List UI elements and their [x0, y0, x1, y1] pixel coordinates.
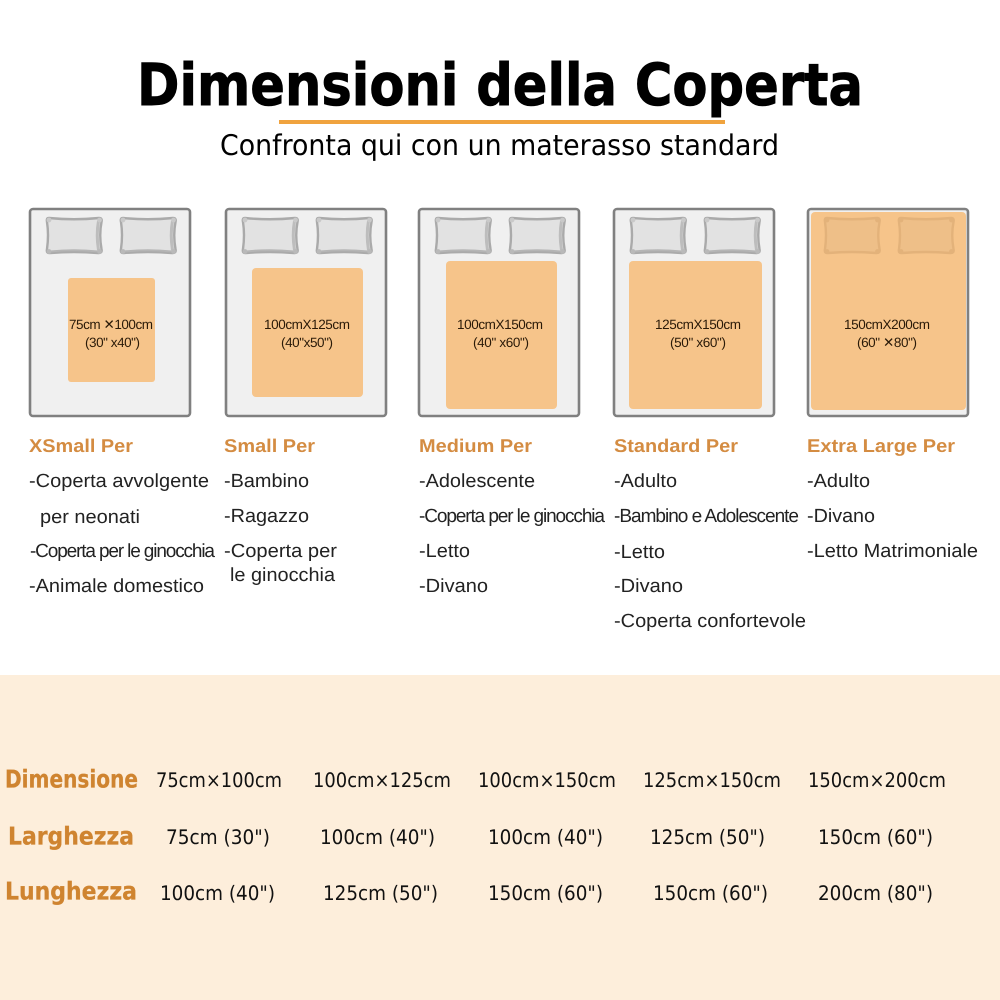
text block: standard uses: -Divano	[614, 576, 683, 597]
panel: medium bed diagram: 100cmX150cm	[457, 317, 543, 332]
text block: standard uses: -Adulto	[614, 471, 677, 492]
table row: lunghezza: 125cm (50")	[323, 881, 438, 905]
table row: dimensione: 100cm×150cm	[478, 768, 616, 792]
text block: standard uses: -Coperta confortevole	[614, 611, 806, 632]
panel: standard bed diagram: (50" x60")	[670, 335, 726, 350]
panel: size table background	[0, 675, 1000, 1000]
table row: lunghezza: Lunghezza	[5, 876, 137, 906]
text block: extra large uses	[807, 435, 978, 562]
panel: extra large bed diagram	[808, 209, 968, 416]
text block: small uses	[224, 435, 338, 586]
text block: small uses: -Ragazzo	[224, 506, 309, 527]
text block: small uses: -Bambino	[224, 471, 309, 492]
table row: larghezza: 100cm (40")	[488, 825, 603, 849]
table row: larghezza: 125cm (50")	[650, 825, 765, 849]
text block: xsmall uses: -Animale domestico	[29, 576, 204, 597]
panel: extra large bed diagram: 150cmX200cm	[844, 317, 930, 332]
table row: dimensione: Dimensione	[5, 764, 138, 794]
text block: extra large uses: -Adulto	[807, 471, 870, 492]
text block: extra large uses: -Divano	[807, 506, 875, 527]
text block: xsmall uses: XSmall Per	[29, 435, 133, 456]
subtitle: Confronta qui con un materasso standard	[220, 129, 779, 162]
table row: larghezza: 75cm (30")	[166, 825, 270, 849]
panel: extra large bed diagram: (60" ✕80")	[857, 335, 917, 350]
table row: dimensione: 100cm×125cm	[313, 768, 451, 792]
text block: medium uses	[419, 435, 605, 597]
text block: medium uses: -Coperta per le ginocchia	[419, 506, 605, 527]
text block: xsmall uses: -Coperta per le ginocchia	[30, 541, 215, 562]
text block: xsmall uses: per neonati	[40, 507, 140, 528]
title: Dimensioni della Coperta	[137, 51, 863, 119]
table row: lunghezza: 150cm (60")	[653, 881, 768, 905]
text block: standard uses	[614, 435, 806, 632]
table row: lunghezza: 200cm (80")	[818, 881, 933, 905]
table row: dimensione: 150cm×200cm	[808, 768, 946, 792]
table row: dimensione: 125cm×150cm	[643, 768, 781, 792]
title underline	[279, 120, 725, 124]
text block: medium uses: -Divano	[419, 576, 488, 597]
panel: xsmall bed diagram	[30, 209, 190, 416]
text block: xsmall uses	[29, 435, 215, 597]
table row: lunghezza	[5, 876, 933, 906]
text block: medium uses: Medium Per	[419, 435, 532, 456]
panel: medium bed diagram: (40" x60")	[473, 335, 529, 350]
text block: medium uses: -Letto	[419, 541, 470, 562]
panel: small bed diagram: 100cmX125cm	[264, 317, 350, 332]
panel: standard bed diagram	[614, 209, 774, 416]
panel: standard bed diagram: 125cmX150cm	[655, 317, 741, 332]
panel: small bed diagram: (40"x50")	[281, 335, 333, 350]
panel: xsmall bed diagram: 75cm ✕100cm	[69, 317, 153, 332]
text block: medium uses: -Adolescente	[419, 471, 535, 492]
panel: xsmall bed diagram: (30" x40")	[85, 335, 140, 350]
table row: larghezza: 100cm (40")	[320, 825, 435, 849]
text block: xsmall uses: -Coperta avvolgente	[29, 471, 209, 492]
text block: standard uses: -Bambino e Adolescente	[614, 506, 799, 527]
text block: extra large uses: -Letto Matrimoniale	[807, 541, 978, 562]
text block: standard uses: -Letto	[614, 542, 665, 563]
table row: lunghezza: 150cm (60")	[488, 881, 603, 905]
text block: standard uses: Standard Per	[614, 435, 738, 456]
text block: small uses: Small Per	[224, 435, 315, 456]
panel: small bed diagram	[226, 209, 386, 416]
text block: small uses: le ginocchia	[230, 565, 335, 586]
table row: larghezza	[8, 822, 933, 850]
table row: dimensione	[5, 764, 946, 794]
text block: extra large uses: Extra Large Per	[807, 435, 955, 456]
table row: lunghezza: 100cm (40")	[160, 881, 275, 905]
table row: larghezza: 150cm (60")	[818, 825, 933, 849]
table row: larghezza: Larghezza	[8, 822, 134, 850]
text block: small uses: -Coperta per	[224, 541, 338, 562]
table row: dimensione: 75cm×100cm	[156, 768, 282, 792]
panel: medium bed diagram	[419, 209, 579, 416]
